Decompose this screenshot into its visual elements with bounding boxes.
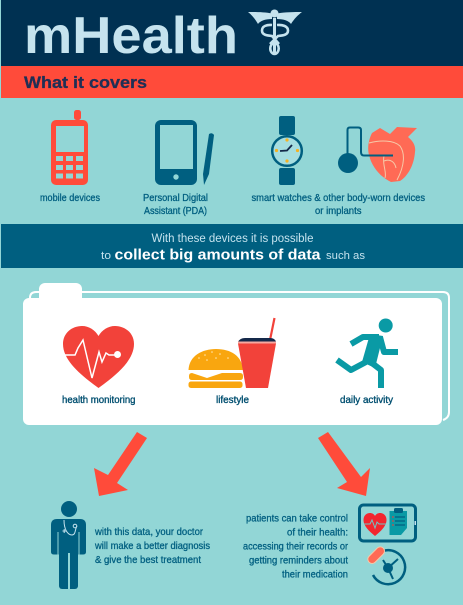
band: collect data statement: such as [326,250,366,262]
text: patient benefit: their medication [282,570,348,580]
icon: PDA with stylus [155,120,214,185]
label: smart watches and implants: smart watches & other body-worn devices [252,193,425,204]
heading band: what it covers [1,66,463,98]
icon: smart watch [272,116,302,185]
arrow: right [318,432,370,496]
text: doctor benefit [94,527,210,566]
icon: mobile phone [51,110,88,185]
arrow: left [94,432,147,496]
band: collect data statement [1,224,463,268]
icon: tablet with records [360,505,416,541]
band: collect data statement: With these devices it is possible [152,233,314,245]
text: patient benefit [243,514,348,580]
icon: burger and drink [188,318,276,388]
icon: pill and clock [366,545,405,584]
label: mobile devices: mobile devices [40,193,100,204]
text: doctor benefit: with this data, your doctor [94,527,203,538]
icon: doctor [51,501,86,590]
text: patient benefit: getting reminders about [249,556,348,566]
icon: caduceus [248,10,302,55]
header banner [1,0,463,66]
text: patient benefit: accessing their records or [243,542,348,552]
label: health monitoring: health monitoring [62,395,136,406]
text: patient benefit: patients can take control [246,514,348,524]
text: doctor benefit: will make a better diagnosis [94,541,210,552]
label: smart watches and implants: or implants [315,206,362,217]
label: personal digital assistant: Assistant (PDA) [144,206,207,217]
label: personal digital assistant [143,193,208,217]
icon: runner [337,318,398,388]
label: daily activity: daily activity [340,395,394,406]
band: collect data statement: to [101,250,111,262]
title: mHealth [24,7,238,65]
text: patient benefit: of their health: [287,528,348,538]
label: personal digital assistant: Personal Digital [143,193,208,204]
label: smart watches and implants [252,193,425,217]
panel: folder [23,283,449,425]
label: lifestyle: lifestyle [216,395,249,406]
heading band: what it covers: What it covers [24,73,147,92]
text: doctor benefit: & give the best treatment [95,555,201,566]
band: collect data statement: collect big amounts of data [114,248,322,264]
icon: heart implant [338,127,417,182]
icon: heart with pulse [63,326,134,388]
